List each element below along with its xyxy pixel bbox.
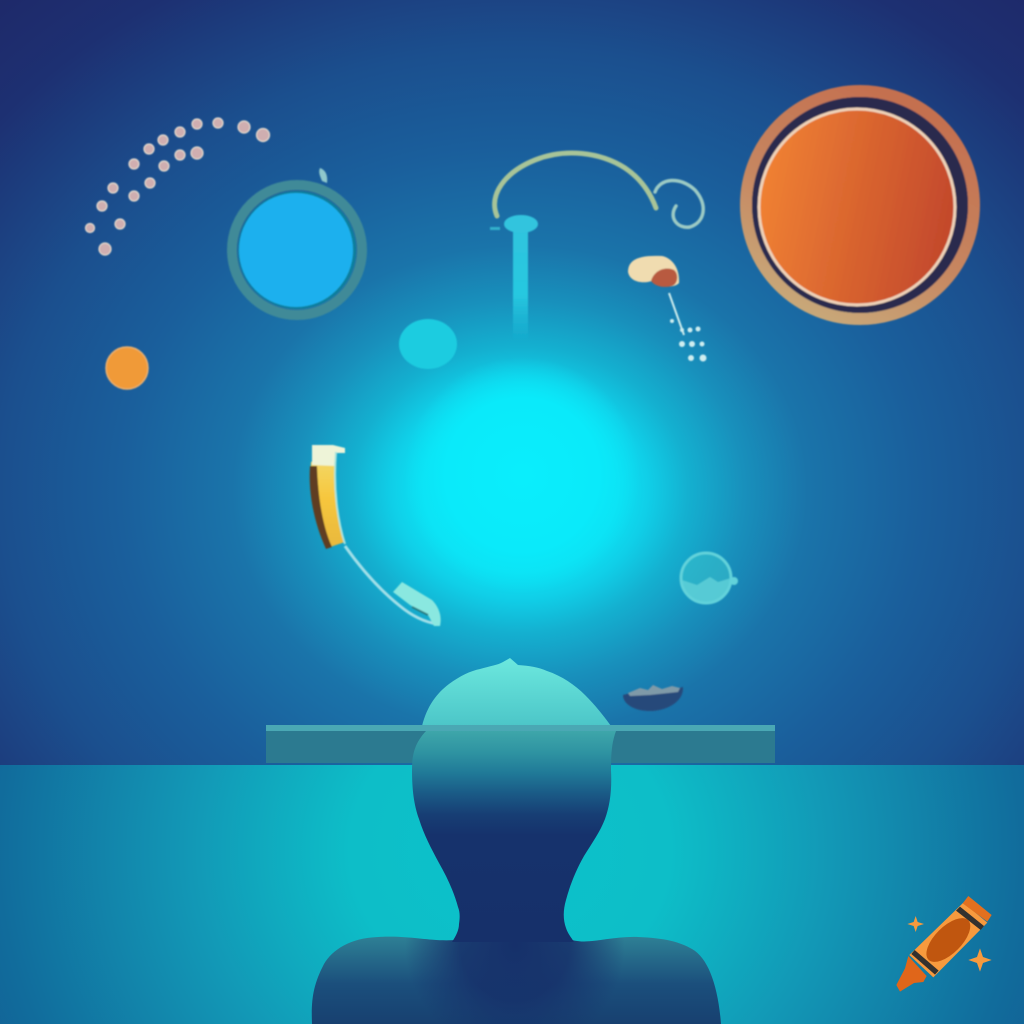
icon: small bubble with wave — [681, 553, 738, 603]
crayon body — [909, 903, 987, 977]
central glowing orb — [404, 357, 640, 593]
figure head and neck — [412, 731, 616, 942]
crayon bands — [911, 907, 984, 975]
figure head dome — [422, 658, 611, 726]
icon: lamp post — [490, 215, 538, 340]
sparkle large — [968, 948, 992, 972]
crayon tip — [896, 956, 927, 992]
sparkle small — [907, 916, 924, 932]
floor band — [0, 765, 1024, 1024]
icon: dark bowl — [623, 685, 683, 711]
icon: crayon logo — [896, 896, 992, 992]
icon: dotted arc — [86, 118, 270, 255]
icon: blue ringed planet — [232, 168, 362, 315]
crayon label — [919, 911, 978, 969]
icon: mushroom cap with falling specks — [628, 256, 706, 362]
icon: curved yellow horn with tail — [310, 445, 441, 626]
shelf — [266, 725, 775, 763]
icon: small cyan blob — [399, 319, 457, 369]
icon: orange ringed sun — [746, 91, 974, 319]
icon: small orange planet — [106, 347, 148, 389]
crayon cap — [963, 896, 992, 922]
icon: curled swirl line — [495, 153, 703, 227]
figure shoulders — [312, 937, 721, 1024]
figure silhouette — [312, 731, 721, 1024]
